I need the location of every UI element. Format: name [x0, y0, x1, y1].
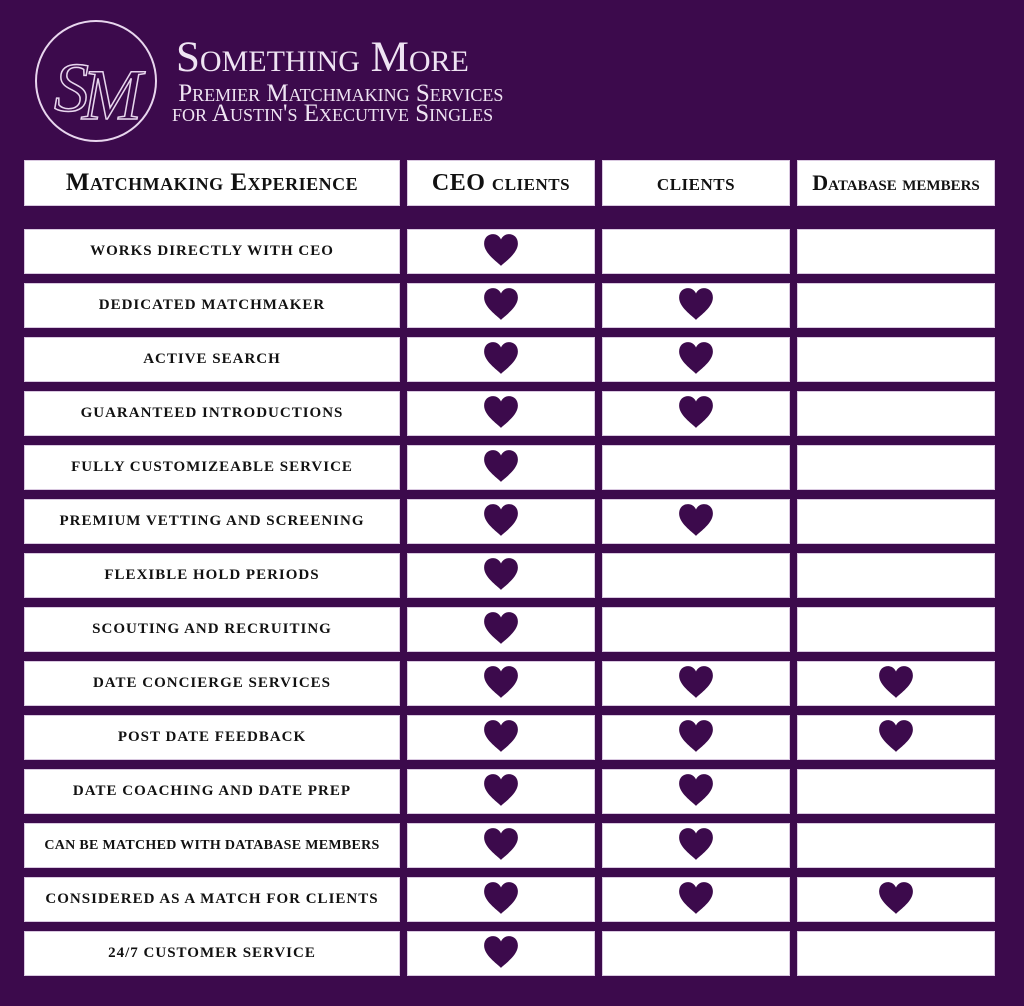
logo: M: [81, 55, 146, 135]
subtitle: for Austin's Executive Singles: [172, 100, 493, 127]
table body: FLEXIBLE HOLD PERIODS: [104, 567, 320, 583]
logo: S: [54, 50, 89, 127]
table body: DATE CONCIERGE SERVICES: [93, 675, 331, 691]
table header: [24, 160, 995, 206]
logo: [35, 20, 157, 142]
subtitle: [172, 80, 503, 127]
table body: GUARANTEED INTRODUCTIONS: [81, 405, 343, 421]
table header: Database members: [812, 170, 980, 195]
table body: CAN BE MATCHED WITH DATABASE MEMBERS: [44, 838, 380, 852]
table body: WORKS DIRECTLY WITH CEO: [90, 243, 334, 259]
table body: POST DATE FEEDBACK: [118, 729, 306, 745]
table body: CONSIDERED AS A MATCH FOR CLIENTS: [45, 891, 379, 907]
table header: Matchmaking Experience: [66, 169, 358, 196]
table body: SCOUTING AND RECRUITING: [92, 621, 332, 637]
subtitle: Premier Matchmaking Services: [178, 80, 503, 107]
table header: CEO clients: [432, 170, 570, 196]
table body: 24/7 CUSTOMER SERVICE: [108, 945, 316, 961]
table body: DATE COACHING AND DATE PREP: [73, 783, 351, 799]
table body: [24, 229, 995, 976]
table body: FULLY CUSTOMIZEABLE SERVICE: [71, 459, 353, 475]
table body: PREMIUM VETTING AND SCREENING: [59, 513, 364, 529]
title: Something More: [176, 34, 469, 81]
table body: ACTIVE SEARCH: [143, 351, 281, 367]
table body: DEDICATED MATCHMAKER: [99, 297, 325, 313]
table header: clients: [657, 170, 735, 196]
